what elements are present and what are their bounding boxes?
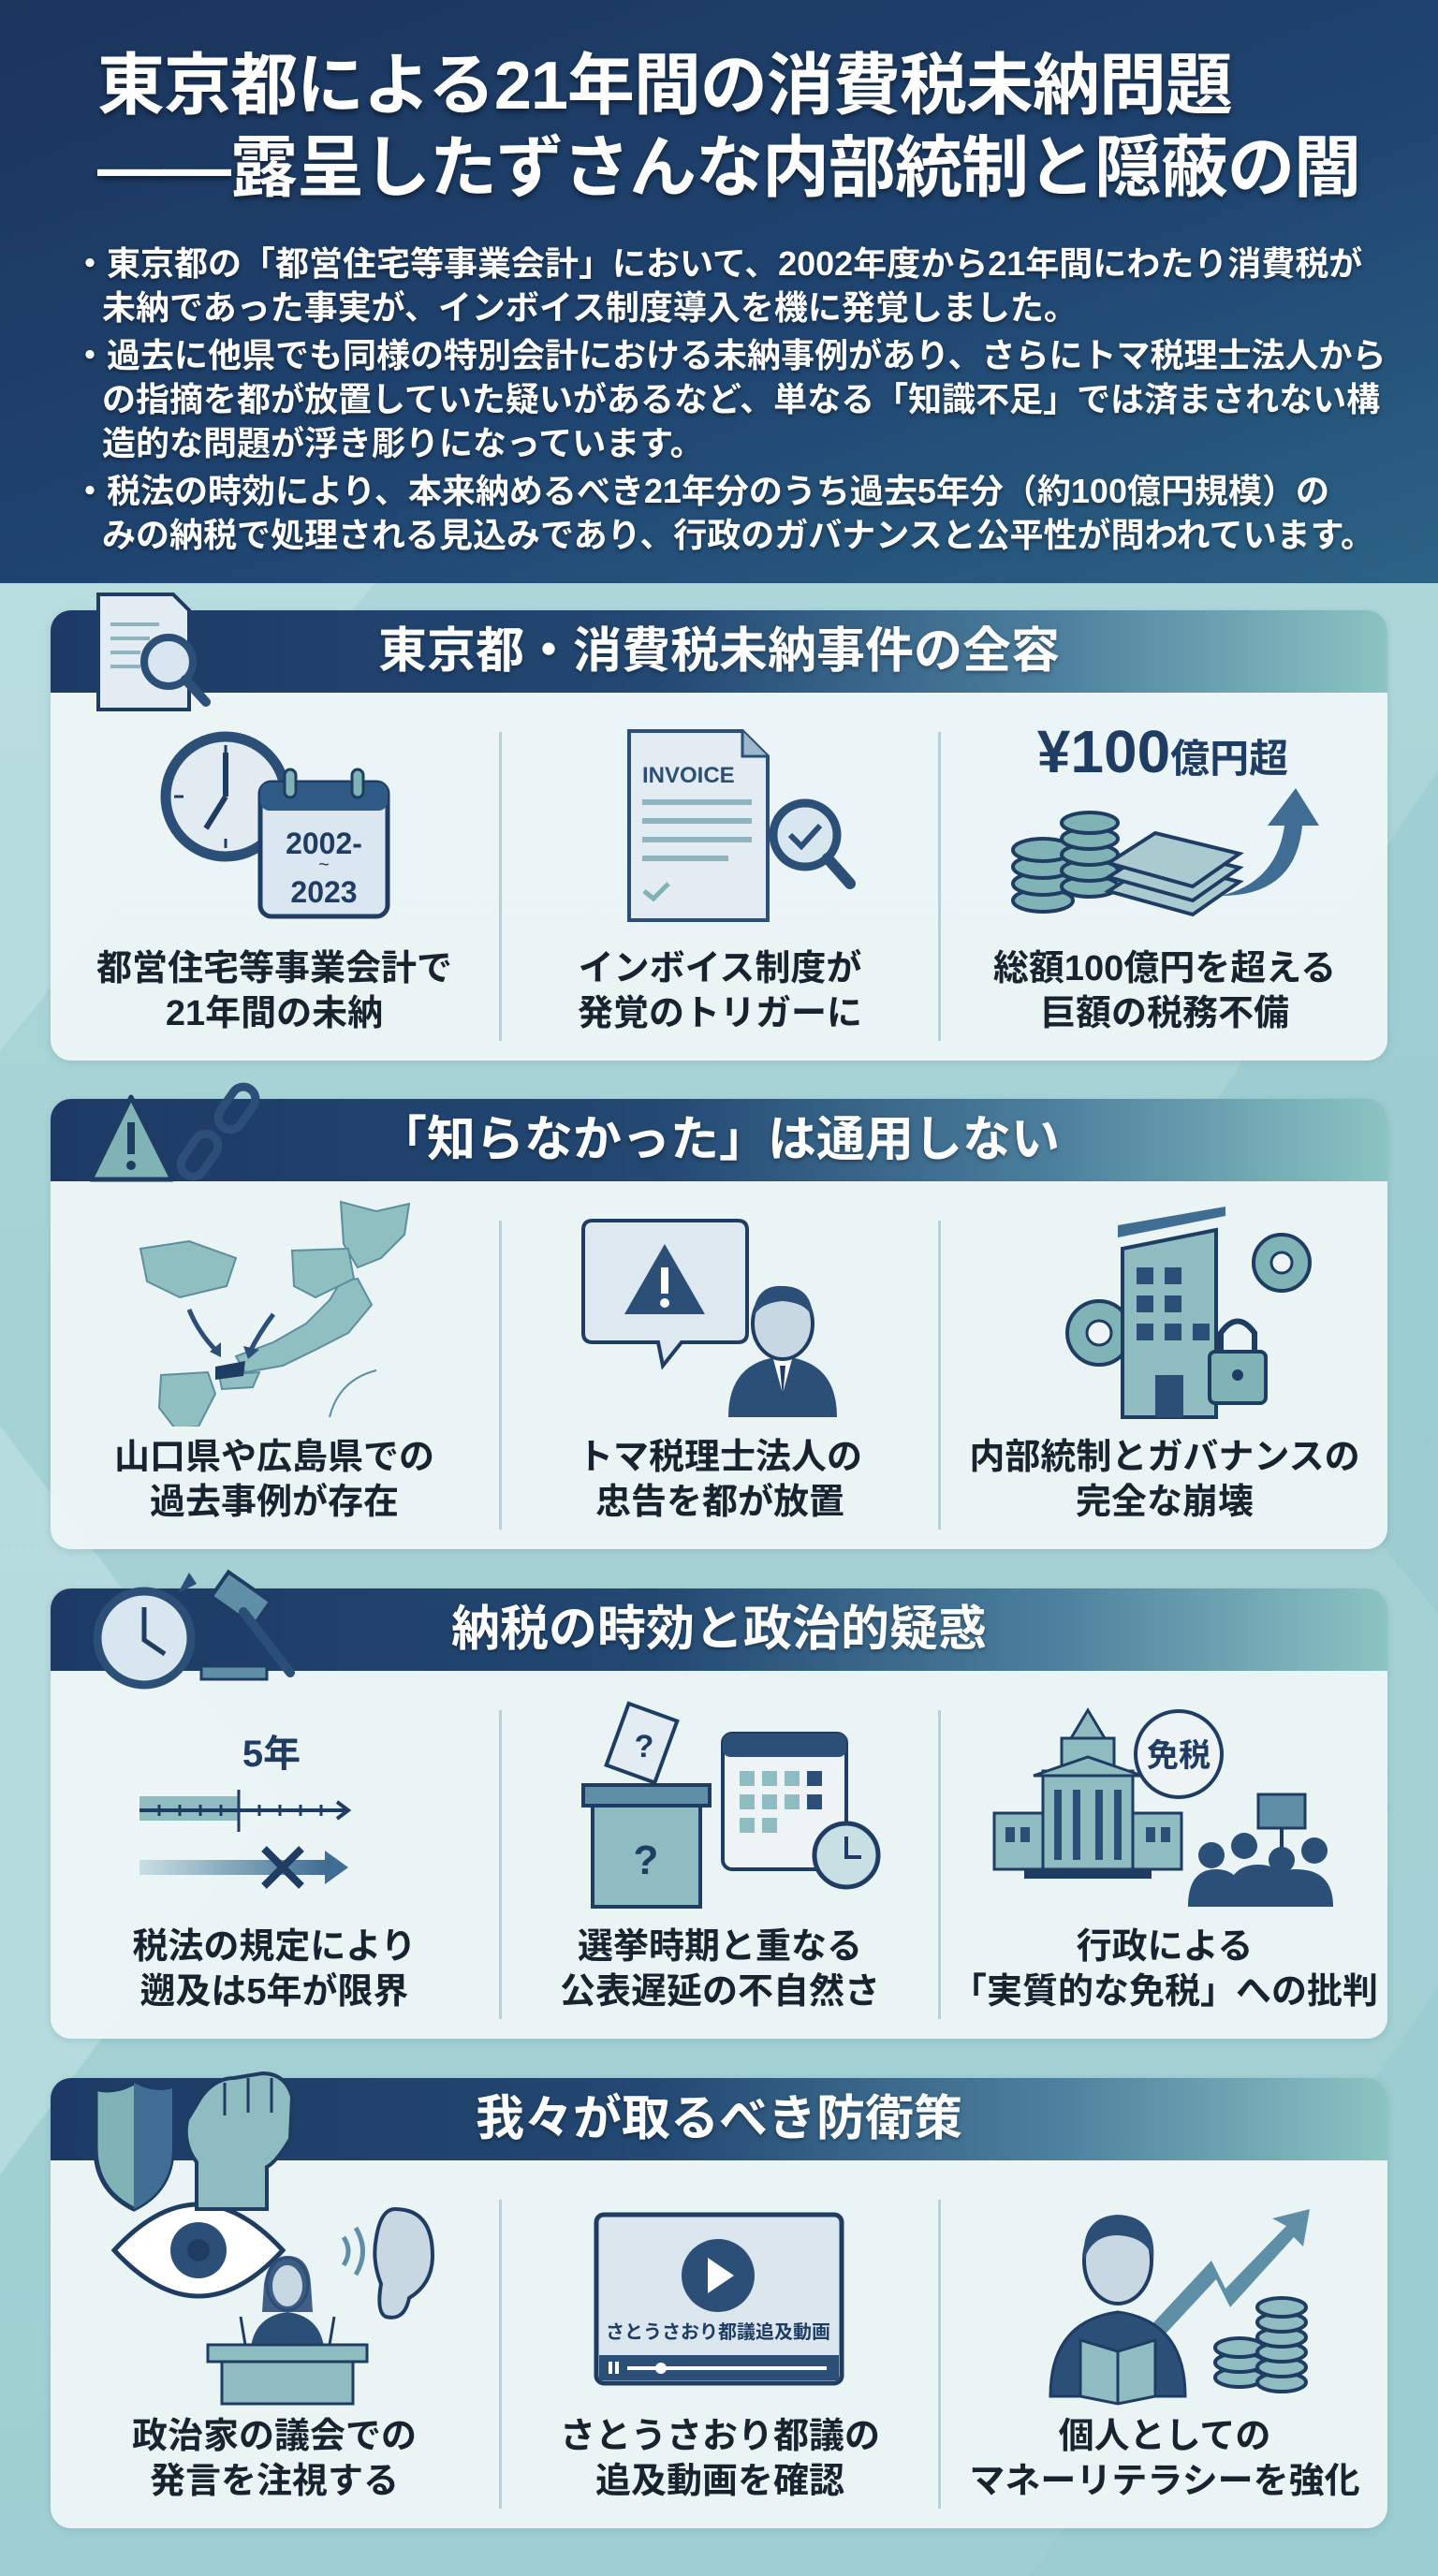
panel: statute of limitations: [51, 1588, 1387, 2039]
icon: man reading with rising arrow and coins: [1049, 2209, 1310, 2406]
panel: defense measures: [51, 2078, 1387, 2528]
caption: 選挙時期と重なる: [578, 1927, 862, 1967]
icon: ballot box and calendar: ?: [635, 1729, 653, 1764]
caption: [96, 949, 452, 1033]
icon: eye, speaker, ear: [110, 2202, 434, 2406]
caption: マネーリテラシーを強化: [969, 2462, 1360, 2501]
intro bullets: ・過去に他県でも同様の特別会計における未納事例があり、さらにトマ税理士法人から: [73, 336, 1387, 374]
caption: [969, 2417, 1360, 2501]
caption: 発言を注視する: [150, 2462, 399, 2501]
heading: defense: 我々が取るべき防衛策: [476, 2092, 962, 2146]
caption: 「実質的な免税」への批判: [951, 1972, 1378, 2012]
intro bullets: 造的な問題が浮き彫りになっています。: [102, 424, 704, 462]
heading: statute: 納税の時効と政治的疑惑: [451, 1603, 987, 1657]
caption: 21年間の未納: [166, 994, 383, 1033]
icon: invoice with magnifier: [627, 729, 856, 922]
caption: [114, 1438, 434, 1522]
title: 東京都による21年間の消費税未納問題: [97, 49, 1232, 124]
caption: 政治家の議会での: [132, 2417, 417, 2456]
heading: overview: 東京都・消費税未納事件の全容: [378, 624, 1060, 679]
icon: clock and gavel header: [94, 1569, 295, 1689]
icon: 100 billion yen money: [1011, 718, 1319, 917]
caption: 過去事例が存在: [150, 1483, 399, 1522]
icon: invoice with magnifier: INVOICE: [642, 763, 735, 788]
icon: 5 year timeline: [139, 1734, 352, 1889]
panel: overview: [51, 610, 1387, 1061]
caption: インボイス制度が: [579, 949, 861, 988]
background facets: [0, 583, 1438, 2174]
caption: 内部統制とガバナンスの: [969, 1438, 1360, 1477]
caption: [132, 1927, 417, 2012]
icon: video player: [594, 2213, 844, 2385]
intro bullets: の指摘を都が放置していた疑いがあるなど、単なる「知識不足」では済まされない構: [102, 380, 1380, 418]
caption: 巨額の税務不備: [1040, 994, 1289, 1033]
caption: 個人としての: [1059, 2417, 1270, 2456]
icon: shield and fist header: [94, 2071, 290, 2212]
intro bullets: ・税法の時効により、本来納めるべき21年分のうち過去5年分（約100億円規模）の: [73, 472, 1329, 510]
caption: 税法の規定により: [132, 1927, 417, 1967]
caption: 都営住宅等事業会計で: [96, 949, 452, 988]
icon: collapsing building, gears, lock: [1065, 1207, 1312, 1419]
icon: diet building and protest: 免税: [1147, 1738, 1211, 1774]
intro bullets: みの納税で処理される見込みであり、行政のガバナンスと公平性が問われています。: [102, 516, 1374, 554]
icon: document search header: [96, 593, 211, 711]
icon: clock and calendar: [161, 732, 389, 919]
caption: さとうさおり都議の: [560, 2417, 880, 2456]
icon: clock and calendar: 2002-: [286, 827, 362, 860]
caption: [560, 2417, 880, 2501]
icon: clock and calendar: ~: [318, 855, 330, 875]
caption: [560, 1927, 880, 2012]
caption: 発覚のトリガーに: [578, 994, 862, 1033]
caption: 追及動画を確認: [595, 2462, 844, 2501]
caption: 忠告を都が放置: [595, 1483, 844, 1522]
intro bullets: ・東京都の「都営住宅等事業会計」において、2002年度から21年間にわたり消費税が: [73, 244, 1362, 283]
heading: no excuse: 「知らなかった」は通用しない: [378, 1113, 1060, 1167]
title: ——露呈したずさんな内部統制と隠蔽の闇: [97, 131, 1360, 206]
caption: [951, 1927, 1378, 2012]
title: [95, 49, 1360, 206]
icon: 5 year timeline: 5年: [242, 1734, 301, 1775]
caption: トマ税理士法人の: [578, 1438, 862, 1477]
icon: warning bubble and advisor: [581, 1219, 837, 1417]
caption: [578, 1438, 862, 1522]
icon: ballot box and calendar: [581, 1701, 880, 1909]
caption: 山口県や広島県での: [114, 1438, 434, 1477]
caption: [578, 949, 862, 1033]
intro bullets: 未納であった事実が、インボイス制度導入を機に発覚しました。: [102, 288, 1078, 327]
icon: japan map: [139, 1200, 410, 1427]
panel: no excuse: [51, 1099, 1387, 1549]
icon: video player: さとうさおり都議追及動画: [606, 2321, 830, 2343]
caption: [969, 1438, 1360, 1522]
icon: 100 billion yen money: ¥100億円超: [1037, 718, 1288, 785]
icon: warning and broken chain header: [90, 1082, 260, 1181]
icon: clock and calendar: 2023: [290, 875, 358, 909]
caption: [993, 949, 1336, 1033]
icon: diet building and protest: [992, 1707, 1333, 1907]
caption: 行政による: [1077, 1927, 1253, 1967]
caption: 遡及は5年が限界: [139, 1972, 409, 2012]
intro bullets: [73, 244, 1387, 554]
header background: [0, 0, 1438, 583]
caption: 公表遅延の不自然さ: [560, 1972, 880, 2012]
caption: [132, 2417, 417, 2501]
caption: 完全な崩壊: [1076, 1483, 1254, 1522]
caption: 総額100億円を超える: [993, 949, 1336, 988]
icon: ballot box and calendar: ?: [634, 1837, 658, 1883]
